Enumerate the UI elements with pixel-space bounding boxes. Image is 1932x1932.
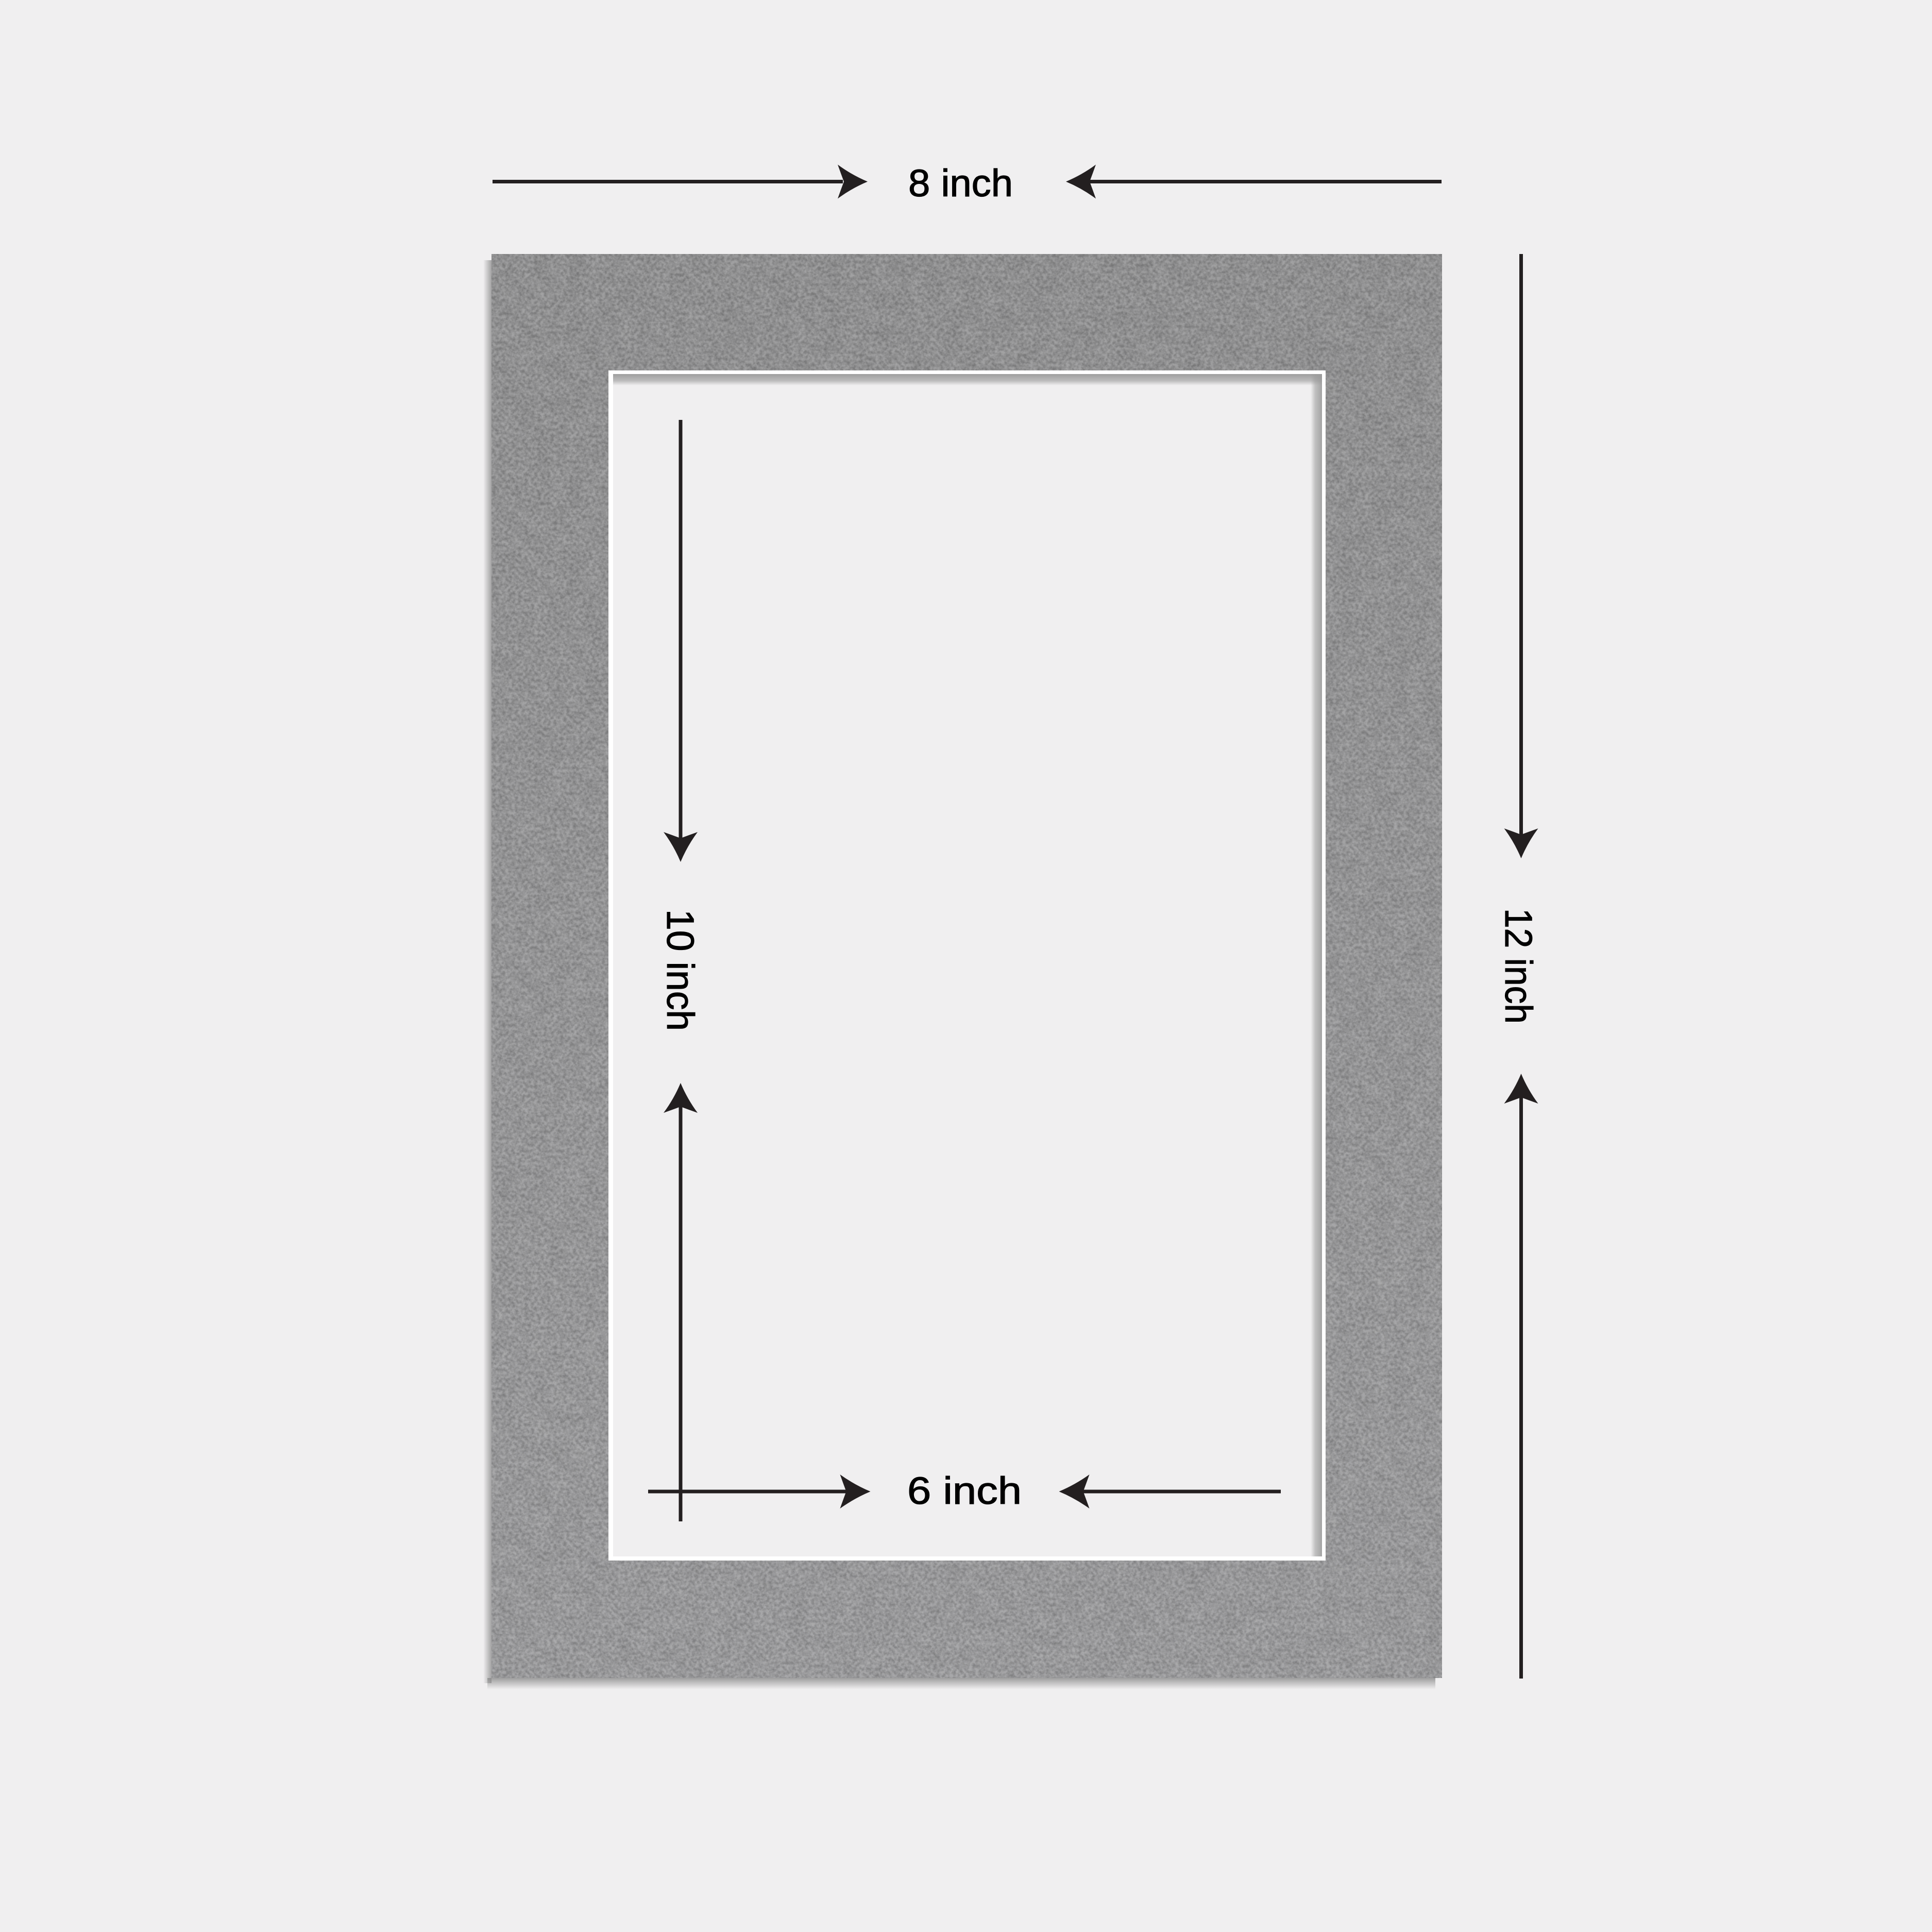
arrow: 12 inch top [1504, 254, 1538, 858]
label: 10 inch: 10 inch [659, 909, 702, 1031]
arrow: 8 inch right [1066, 165, 1442, 199]
inner shadow right [1311, 374, 1322, 1556]
white bevel [608, 370, 1326, 1561]
label: 12 inch: 12 inch [1497, 908, 1540, 1024]
mat paper texture [492, 254, 1442, 1678]
arrow: 10 inch top [664, 420, 698, 862]
mat surface [492, 254, 1442, 1678]
mat outer shadow left [483, 260, 492, 1683]
inner shadow top [613, 374, 1322, 385]
arrow: 10 inch bottom [664, 1083, 698, 1521]
arrow: 6 inch left [648, 1475, 871, 1509]
arrow: 6 inch right [1059, 1475, 1281, 1509]
label: 6 inch: 6 inch [907, 1469, 1022, 1512]
arrow: 12 inch bottom [1504, 1074, 1538, 1679]
label: 8 inch: 8 inch [908, 162, 1013, 205]
arrow: 8 inch left [493, 165, 868, 199]
mat outer shadow bottom [487, 1678, 1435, 1689]
infographic: mat board with dimension arrows [484, 165, 1538, 1688]
window opening [608, 370, 1326, 1561]
panel: mat board [483, 254, 1442, 1689]
